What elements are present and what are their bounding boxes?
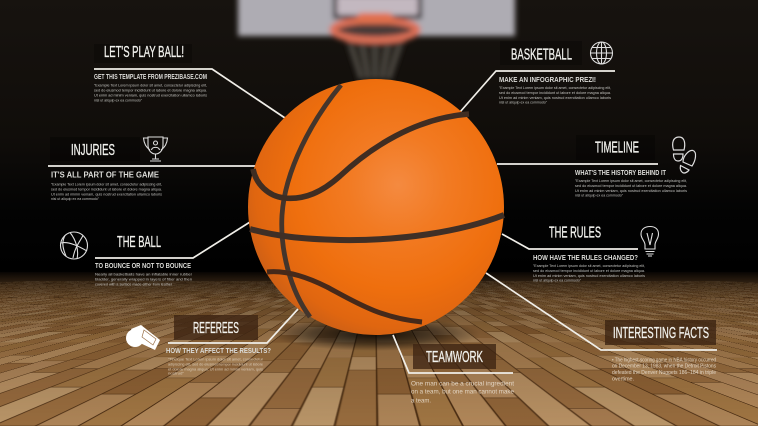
body text: sed do eiusmod tempor incididunt ut labore et dolore magna aliqua.	[575, 183, 687, 188]
body text: adipiscing elit, sed do eiusmod tempor incididunt ut labore	[168, 361, 264, 366]
body text	[411, 380, 514, 404]
body text: bladder, generally wrapped in layers of fiber and then	[95, 276, 192, 281]
connector lines	[48, 69, 717, 373]
body text: a team.	[411, 398, 431, 404]
subheading: TO BOUNCE OR NOT TO BOUNCE	[95, 263, 191, 270]
panel: teamwork	[411, 344, 514, 404]
body text: sed do eiusmod tempor incididunt ut labore et dolore magna aliqua.	[94, 87, 207, 92]
panel: referees	[126, 315, 271, 375]
panel: the rules	[533, 224, 658, 282]
icon: globe	[590, 42, 612, 64]
body text: nostrud"	[168, 370, 185, 375]
body text: One man can be a crucial ingredient	[411, 380, 514, 388]
icon: light bulb	[641, 226, 658, 256]
subheading: IT'S ALL PART OF THE GAME	[51, 170, 160, 180]
body text: defeated the Denver Nuggets 186–184 in triple	[612, 370, 716, 376]
floor horizon fade	[0, 270, 758, 426]
body text: on December 13, 1983, when the Detroit Pistons	[612, 364, 716, 370]
heading: LET'S PLAY BALL!	[104, 44, 184, 61]
body text: Nearly all basketballs have an inflatable inner rubber	[95, 271, 193, 276]
body text: nisi ut aliquip ex ea commodo"	[499, 99, 548, 104]
heading: TIMELINE	[595, 140, 639, 156]
body text: sed do eiusmod tempor incididunt ut labore et dolore magna aliqua.	[499, 90, 611, 95]
body text: "Example Text Lorem ipsum dolor sit amet, consectetur adipiscing elit,	[51, 181, 162, 186]
body text	[612, 358, 716, 382]
body text: "Example Text Lorem ipsum dolor sit amet, consectetur adipiscing elit,	[575, 178, 687, 183]
heading: REFEREES	[193, 320, 239, 337]
seam: vertical curve	[282, 85, 341, 317]
icon: ball outline	[60, 232, 88, 259]
body text: nisi ut aliquip ex ea commodo"	[51, 196, 100, 201]
body text: on a team, but one man cannot make	[411, 388, 514, 396]
body text: "Example Text Lorem ipsum dolor sit amet, consectetur adipiscing elit,	[94, 82, 207, 87]
body text: "Example Text Lorem ipsum dolor sit amet, consectetur adipiscing elit,	[533, 263, 645, 268]
body text: sed do eiusmod tempor incididunt ut labore et dolore magna aliqua.	[533, 268, 645, 273]
heading: INJURIES	[71, 142, 115, 159]
heading: BASKETBALL	[511, 46, 572, 64]
body text: overtime.	[612, 376, 634, 382]
body text: • The highest-scoring game in NBA history occurred	[612, 358, 716, 364]
seam: equator	[250, 215, 504, 240]
body text: Ut enim ad minim veniam, quis nostrud exercitation ullamco laboris	[94, 92, 207, 97]
body text	[533, 263, 645, 282]
seam: lower sweep	[267, 272, 422, 322]
body text: covered with a surface made either from leather	[95, 281, 173, 286]
body text	[168, 356, 264, 375]
subheading: GET THIS TEMPLATE FROM PREZIBASE.COM	[94, 74, 207, 81]
icon: whistle	[126, 325, 160, 350]
heading: THE BALL	[117, 234, 161, 251]
body text	[94, 82, 207, 102]
panel: timeline	[575, 135, 696, 197]
body text	[51, 181, 162, 201]
heading: TEAMWORK	[426, 349, 483, 366]
body text: "Example Text Lorem ipsum dolor sit amet, consectetur adipiscing elit,	[499, 85, 611, 90]
icon: footprints	[673, 137, 696, 173]
panel: interesting facts	[605, 320, 716, 382]
body text: nisi ut aliquip ex ea commodo"	[575, 192, 624, 197]
ball floor shadow	[270, 317, 480, 351]
body text: nisi ut aliquip ex ea commodo"	[94, 97, 143, 102]
panel: basketball	[499, 41, 612, 104]
icon: trophy	[144, 137, 168, 161]
body text: nisi ut aliquip ex ea commodo"	[533, 277, 582, 282]
body text: Ut enim ad minim veniam, quis nostrud exercitation ullamco laboris	[499, 95, 611, 100]
panel: injuries	[50, 137, 168, 201]
subheading: HOW THEY AFFECT THE RESULTS?	[166, 348, 271, 355]
body text: "Tincique Text Lorem ipsum dolor sit amet, consectetur	[168, 356, 264, 361]
basketball	[248, 79, 504, 335]
blurred backboard and hoop	[238, 0, 515, 80]
subheading: WHAT'S THE HISTORY BEHIND IT	[575, 170, 667, 177]
body text: sed do eiusmod tempor incididunt ut labore et dolore magna aliqua.	[51, 186, 162, 191]
body text: Ut enim ad minim veniam, quis nostrud exercitation ullamco laboris	[51, 191, 162, 196]
seam: upper sweep	[253, 114, 469, 198]
body text	[499, 85, 611, 104]
body text	[575, 178, 687, 197]
panel: the ball	[60, 232, 193, 286]
arena dark background	[0, 0, 758, 272]
body text: Ut enim ad minim veniam, quis nostrud exercitation ullamco laboris	[575, 188, 687, 193]
body text	[95, 271, 193, 286]
body text: Ut enim ad minim veniam, quis nostrud exercitation ullamco laboris	[533, 273, 645, 278]
subheading: HOW HAVE THE RULES CHANGED?	[533, 255, 638, 262]
subheading: MAKE AN INFOGRAPHIC PREZI!	[499, 77, 596, 84]
body text: et dolore magna aliqua. Ut enim ad minim veniam, quis	[168, 366, 263, 371]
panel: let's play ball	[94, 44, 207, 102]
heading: THE RULES	[549, 224, 601, 242]
